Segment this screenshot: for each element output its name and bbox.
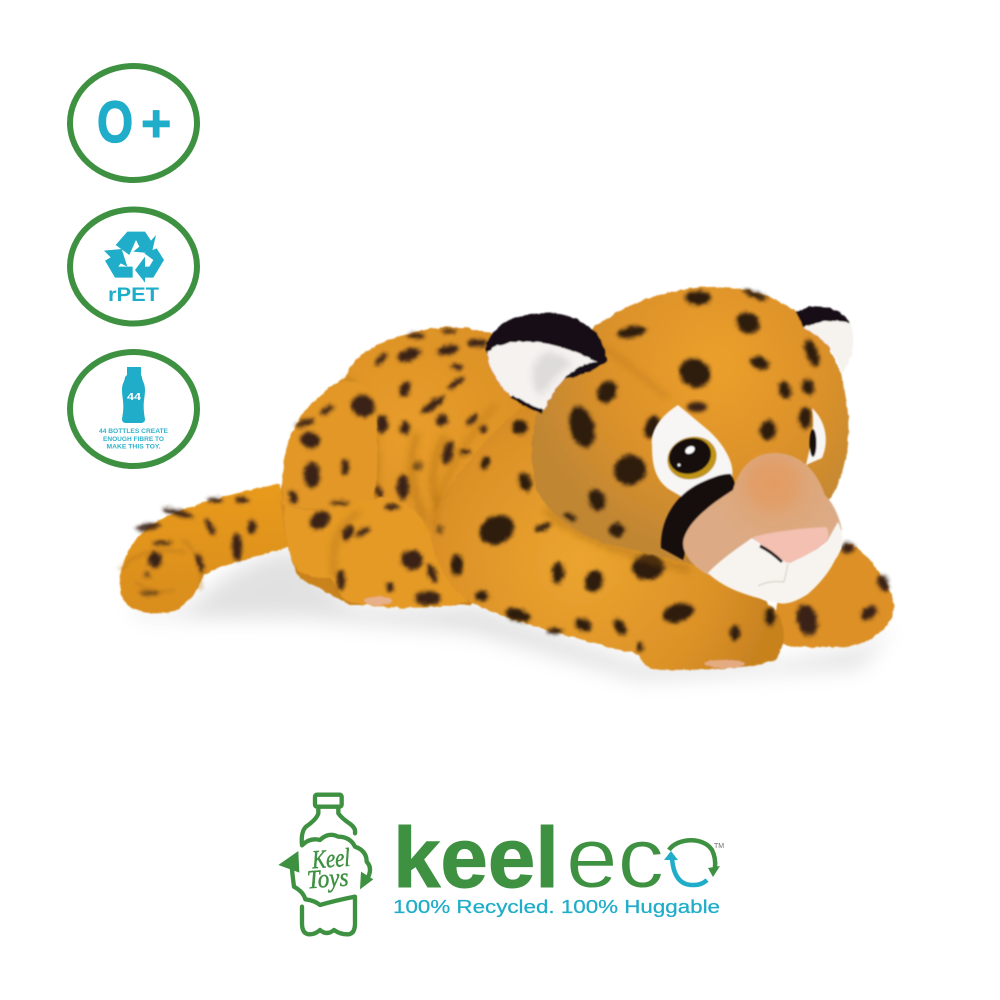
mouth line (760, 546, 782, 562)
badge caption: MAKE THIS TOY. (106, 444, 161, 450)
plush cheetah toy (120, 287, 895, 680)
hind foot shading (333, 512, 360, 578)
logo wordmark: keeleco: ec (566, 811, 664, 906)
body spots (373, 329, 487, 500)
head cast shadow (545, 510, 690, 570)
logo arrowheads (278, 851, 299, 873)
icon: recycling arrows (104, 232, 164, 283)
far paw spots (793, 543, 891, 638)
badge: 44 bottles: 44 (127, 392, 142, 403)
logo wordmark: keeleco: TM (714, 843, 724, 850)
shoulder crease (431, 405, 495, 530)
ground shadow (135, 548, 895, 680)
logo bottle text: Toys (306, 863, 349, 894)
face details (652, 402, 842, 604)
logo tagline: 100% Recycled. 100% Huggable (393, 896, 720, 917)
pink nose (753, 527, 828, 563)
badge caption (99, 428, 169, 450)
tail spots (135, 497, 256, 596)
icon: recycling o (669, 840, 715, 885)
logo bottle text (306, 843, 351, 894)
logo: Keel Toys recycled bottle (278, 795, 373, 934)
black muzzle stripe (661, 474, 738, 560)
body folds (285, 378, 445, 520)
badge caption: 44 BOTTLES CREATE (99, 428, 169, 435)
badge: rPET recycling: rPET (108, 285, 159, 306)
hind toe pad (364, 597, 392, 605)
fur group (120, 287, 894, 670)
far ear (796, 307, 853, 374)
far paw (770, 543, 894, 648)
front toe pad (705, 660, 745, 668)
logo bottle text: Keel (310, 843, 351, 874)
badge: 44 bottles (70, 352, 197, 466)
badge caption: ENOUGH FIBRE TO (103, 436, 164, 443)
near eye patch (652, 405, 733, 498)
near ear (485, 313, 607, 412)
far eye patch (806, 408, 826, 465)
nose bridge shade (746, 460, 798, 508)
badge: age 0+: + (141, 95, 171, 153)
hind leg (283, 381, 377, 509)
far eye (810, 429, 816, 457)
hind foot (284, 497, 468, 608)
badge: rPET recycling (70, 210, 197, 324)
tail curl shading (120, 540, 201, 591)
muzzle (683, 453, 842, 575)
head spots (534, 288, 822, 537)
tail (120, 484, 295, 613)
front leg spots (437, 420, 775, 652)
head fold shading (600, 345, 668, 398)
head (532, 287, 848, 570)
near eye (662, 430, 722, 486)
badge: age 0+ (70, 66, 197, 180)
logo wordmark: keeleco (393, 811, 724, 906)
badge: age 0+: O (97, 90, 133, 155)
logo wordmark: keeleco: keel (393, 811, 559, 906)
icon: bottle (122, 367, 145, 423)
white chin (708, 522, 842, 604)
chin cleft (758, 564, 788, 586)
brow spot (687, 402, 707, 412)
back and haunch (281, 327, 560, 605)
hind foot spots (306, 501, 441, 605)
front leg (432, 395, 784, 670)
hind leg spots (287, 390, 379, 505)
